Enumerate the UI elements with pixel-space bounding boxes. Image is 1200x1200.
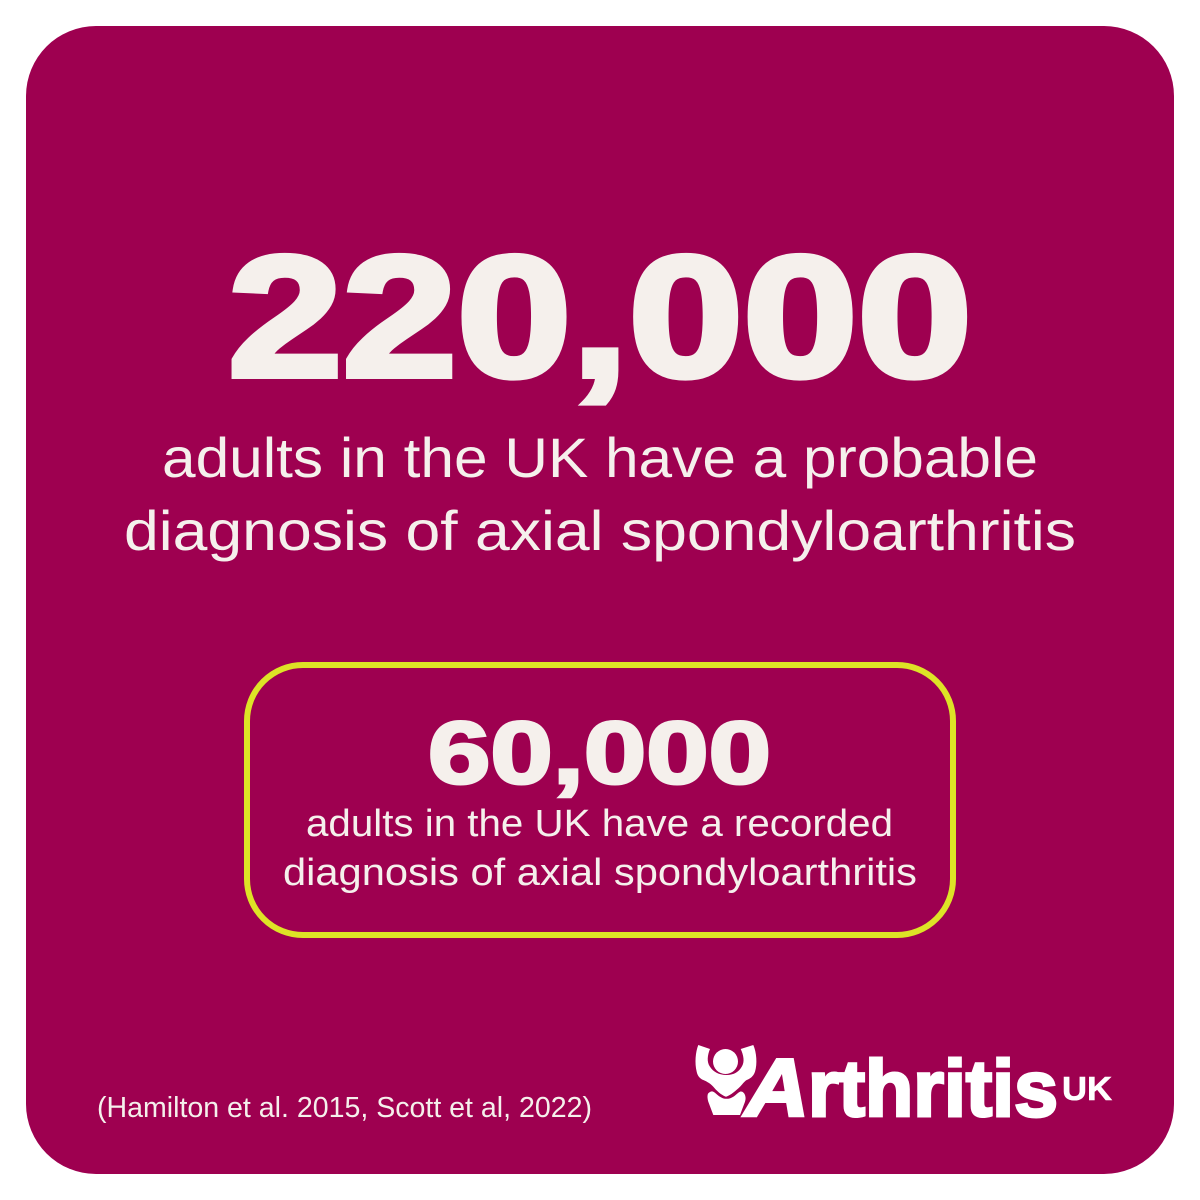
callout number: 60,000: 60,000 [428,703,771,802]
text block: probable diagnosis [124,426,1076,562]
logo wordmark: rthritis [808,1044,1058,1133]
callout text: adults in the UK have a recorded [306,803,893,845]
text block: probable diagnosis: diagnosis of axial spondyloarthritis [124,499,1076,562]
icon: figure with raised arms [696,1045,756,1115]
logo: Arthritis UK [696,1043,1112,1134]
callout text [283,803,917,894]
callout text: diagnosis of axial spondyloarthritis [283,852,917,894]
logo suffix: UK: UK [1062,1070,1112,1107]
callout: recorded diagnosis box [247,665,953,935]
citation: (Hamilton et al. 2015, Scott et al, 2022) [97,1092,592,1124]
logo wordmark: A [743,1043,809,1134]
text block: probable diagnosis: adults in the UK have a probable [162,426,1038,489]
headline number: 220,000: 220,000 [228,221,972,413]
